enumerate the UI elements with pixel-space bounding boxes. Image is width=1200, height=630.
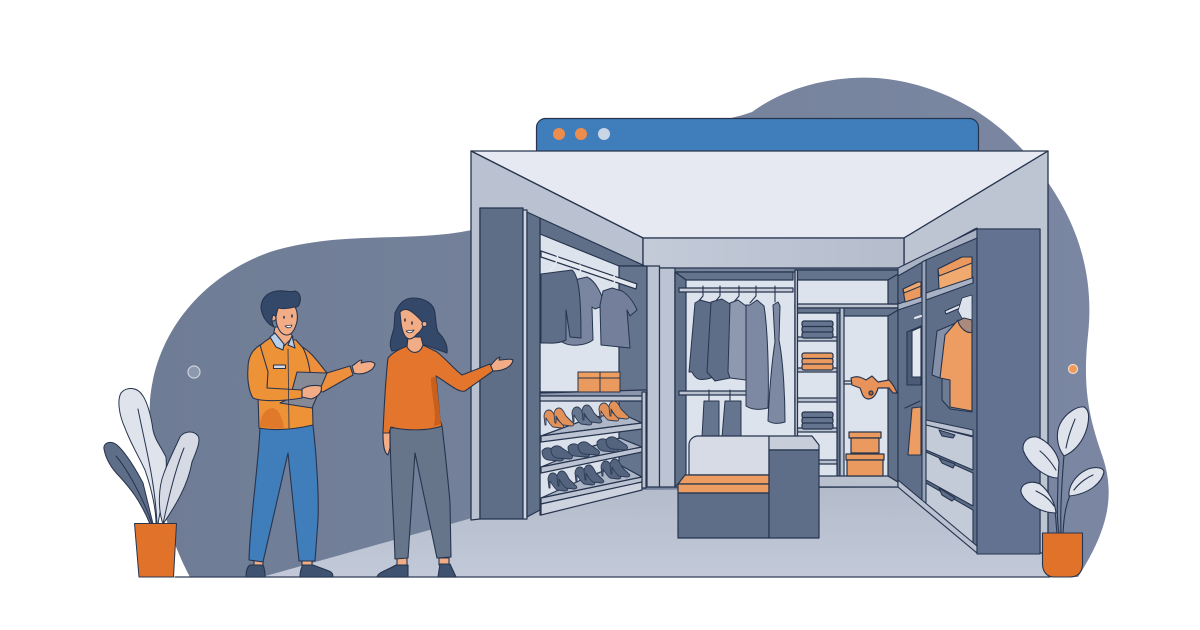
room structure (471, 151, 1048, 553)
dark long-sleeve shirt (541, 270, 581, 343)
flat shoes row 2 (542, 437, 627, 461)
collar (270, 333, 295, 350)
shelving unit (795, 270, 898, 487)
dark leaf (104, 442, 153, 524)
decorative circle left (188, 366, 200, 378)
back wall (675, 272, 795, 487)
back wall lights (540, 233, 620, 392)
leaf top (1057, 407, 1089, 456)
floor band (795, 476, 898, 487)
leaf right mid (1069, 468, 1104, 496)
left hand (383, 433, 390, 455)
extended hand (352, 360, 375, 374)
inner door (527, 212, 540, 517)
center garments (689, 286, 785, 437)
block top (769, 436, 819, 450)
dress (746, 300, 768, 409)
shoe shelf 1 (541, 413, 642, 436)
box small (903, 282, 921, 302)
orange heels row 1 right (599, 401, 629, 421)
shoes rows (542, 401, 630, 491)
right plant (1021, 407, 1104, 577)
right side panel (888, 310, 898, 482)
mouth (285, 325, 292, 328)
left wall (471, 151, 643, 520)
shoe shelf 2 (541, 438, 642, 467)
plinth (898, 480, 977, 553)
block (769, 450, 819, 538)
orange shirt (940, 320, 972, 411)
shoe box on shelf (578, 372, 620, 392)
big leaf (119, 388, 166, 524)
cell inner shadows (837, 313, 840, 481)
thin dress (768, 302, 785, 423)
name badge (274, 365, 286, 368)
hangers (545, 254, 615, 288)
hangers (697, 286, 775, 400)
face (400, 309, 423, 339)
column 2 (660, 268, 675, 487)
collar (958, 318, 972, 332)
shelf lines (795, 337, 843, 341)
ground line (175, 576, 1050, 578)
vertical divider (840, 308, 844, 480)
ear (422, 322, 427, 326)
sweater (383, 345, 493, 433)
box large (938, 257, 972, 289)
eyes (284, 315, 292, 318)
hanging rail (541, 251, 637, 289)
shoes (377, 564, 456, 577)
hand right (490, 357, 513, 371)
base plinth (541, 482, 642, 515)
right shelf band (926, 277, 973, 300)
light strip (523, 210, 527, 519)
drawer 1 (926, 425, 973, 470)
left closet (480, 208, 675, 519)
torso (249, 338, 313, 429)
door panel (480, 208, 523, 519)
trousers (390, 426, 451, 559)
left plant (104, 388, 199, 577)
counter top (926, 420, 973, 436)
top dark band (675, 272, 793, 280)
side back panel (619, 266, 647, 392)
jacket 1 (689, 300, 711, 380)
floor (262, 487, 1048, 577)
lower dark garment (942, 370, 972, 412)
eyes (405, 319, 412, 324)
right wall (904, 151, 1048, 553)
side panel (675, 272, 686, 487)
back beam (643, 238, 904, 268)
white hangers (958, 295, 972, 320)
folded stack orange (802, 353, 833, 370)
shirt shade (260, 408, 284, 429)
orange heels row 1 (544, 408, 574, 428)
folded stack grey 1 (802, 321, 833, 338)
right leaf (159, 432, 199, 524)
grey heels row 1 (572, 405, 602, 425)
header (540, 218, 645, 266)
small hanger rail left (915, 316, 921, 318)
top shelf (540, 390, 647, 396)
center closet (675, 272, 795, 487)
trousers (249, 425, 318, 562)
jacket 2 (707, 299, 730, 381)
pants 2 (722, 401, 741, 437)
backrest (689, 436, 769, 475)
left shelf band (898, 296, 922, 310)
wing body (898, 228, 977, 553)
orange hanging item (851, 376, 897, 399)
upper cell shelf (795, 304, 898, 308)
lower rail (679, 391, 747, 395)
ceiling (471, 151, 1048, 238)
neck (407, 337, 423, 352)
drawer 2 (926, 452, 973, 506)
right arm (300, 346, 353, 392)
hair (261, 291, 300, 327)
upright (922, 260, 926, 505)
sweater shade (431, 376, 441, 426)
hair (390, 298, 447, 353)
white garment (912, 327, 921, 377)
ankles (254, 560, 312, 566)
column 1 (647, 266, 660, 487)
ankles (397, 558, 449, 566)
upper box (849, 432, 881, 438)
shoes (246, 565, 333, 577)
woman (377, 298, 513, 577)
leaf left upper (1023, 437, 1059, 478)
lower box (846, 454, 884, 460)
rail (945, 299, 972, 314)
stems (1055, 455, 1070, 533)
neck (273, 327, 293, 346)
leaf left lower (1021, 482, 1056, 513)
face (276, 307, 297, 335)
top band (795, 270, 898, 280)
hanging orange cloth (908, 407, 921, 455)
background blob (150, 78, 1109, 577)
handles (939, 430, 955, 438)
rail in bay (844, 381, 852, 384)
man (246, 291, 375, 577)
browser window bar (536, 118, 978, 158)
jacket 3 (728, 300, 746, 380)
pot (134, 524, 176, 577)
mid t-shirt (562, 277, 605, 345)
back (795, 270, 898, 487)
right closet wing (898, 228, 1040, 554)
pot (1042, 533, 1082, 577)
pants 1 (702, 401, 719, 437)
bench island (678, 436, 819, 538)
folded stack grey 2 (802, 412, 833, 429)
drawer 3 (926, 483, 973, 543)
left closet clothes (541, 254, 637, 348)
dark frame left garment (907, 326, 921, 385)
hand on tablet (302, 385, 321, 399)
heels row 3 (548, 459, 630, 491)
cell band (797, 308, 840, 313)
left arm (248, 345, 302, 401)
front t-shirt (600, 288, 637, 348)
base (678, 493, 769, 538)
shoe shelf 3 (541, 465, 642, 498)
orange seat (678, 475, 769, 484)
tablet (280, 372, 327, 408)
right door panel (977, 229, 1040, 554)
dark hanging garment (932, 323, 958, 378)
placket (288, 349, 289, 428)
decorative circle right (1068, 364, 1078, 374)
wing frame top (898, 229, 977, 276)
smile (406, 330, 414, 333)
top rail (679, 288, 793, 292)
ear (270, 315, 276, 321)
